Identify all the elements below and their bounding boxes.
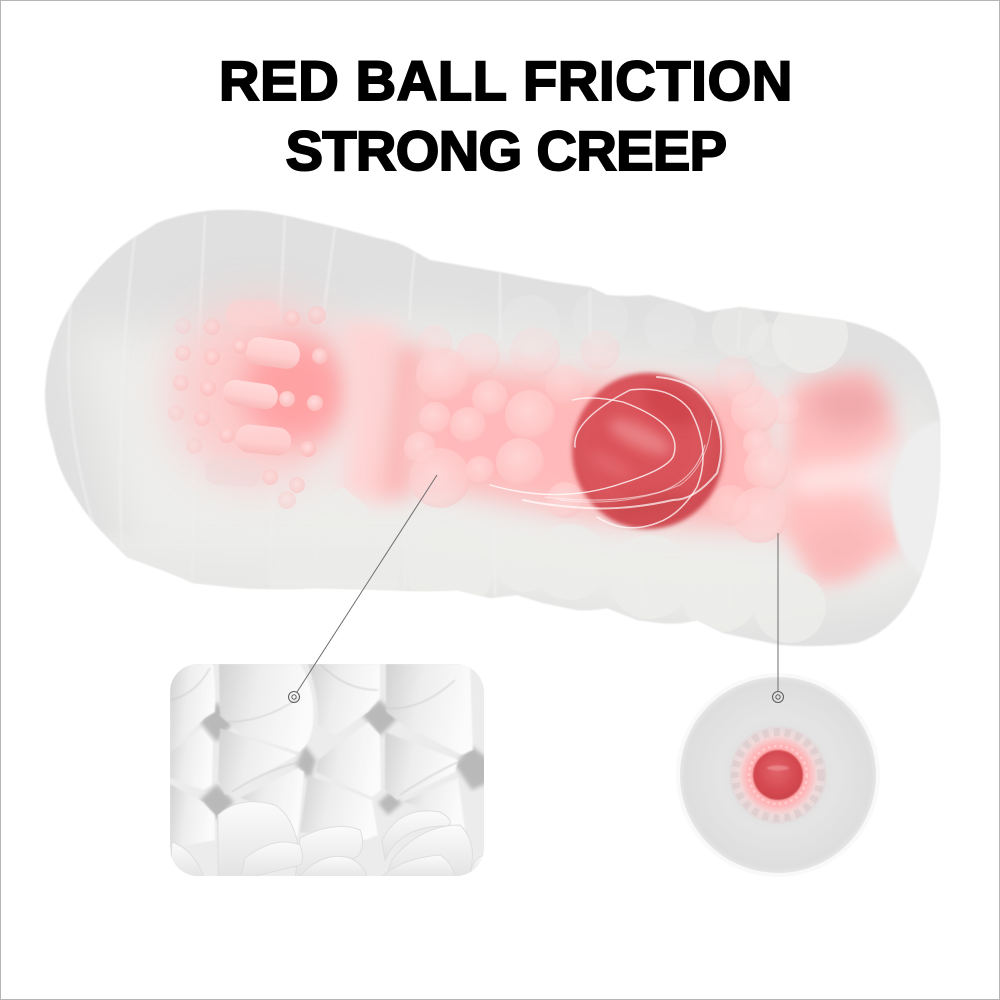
- bead creases: [170, 664, 458, 795]
- bead texture: [404, 325, 800, 543]
- product body: [45, 210, 945, 646]
- panel: circular cross-section: [676, 673, 880, 877]
- marker: rectangle detail: [288, 692, 300, 702]
- crevice diamonds: [200, 700, 490, 820]
- motion swirl: [490, 377, 721, 528]
- leader line: entry detail: [777, 533, 779, 691]
- red glow: entry chamber: [780, 370, 900, 585]
- marker: circle detail: [772, 692, 784, 702]
- ridge between chambers: [340, 320, 402, 505]
- red glow: nub chamber: [172, 302, 348, 482]
- body shading: [89, 328, 916, 612]
- edge scallops: [270, 313, 848, 643]
- body ribs: [72, 218, 590, 513]
- lower bead domes: [170, 802, 484, 880]
- panel: bead texture close-up: [170, 664, 490, 880]
- red ball: [490, 373, 724, 529]
- nubs: [168, 300, 328, 509]
- beads: [170, 664, 473, 848]
- entry opening: [891, 423, 939, 562]
- title: STRONG CREEP: [286, 119, 726, 182]
- leader line: bead detail: [297, 475, 437, 692]
- title: [219, 49, 793, 182]
- red glow: bead chamber: [410, 360, 780, 530]
- title: RED BALL FRICTION: [219, 49, 793, 112]
